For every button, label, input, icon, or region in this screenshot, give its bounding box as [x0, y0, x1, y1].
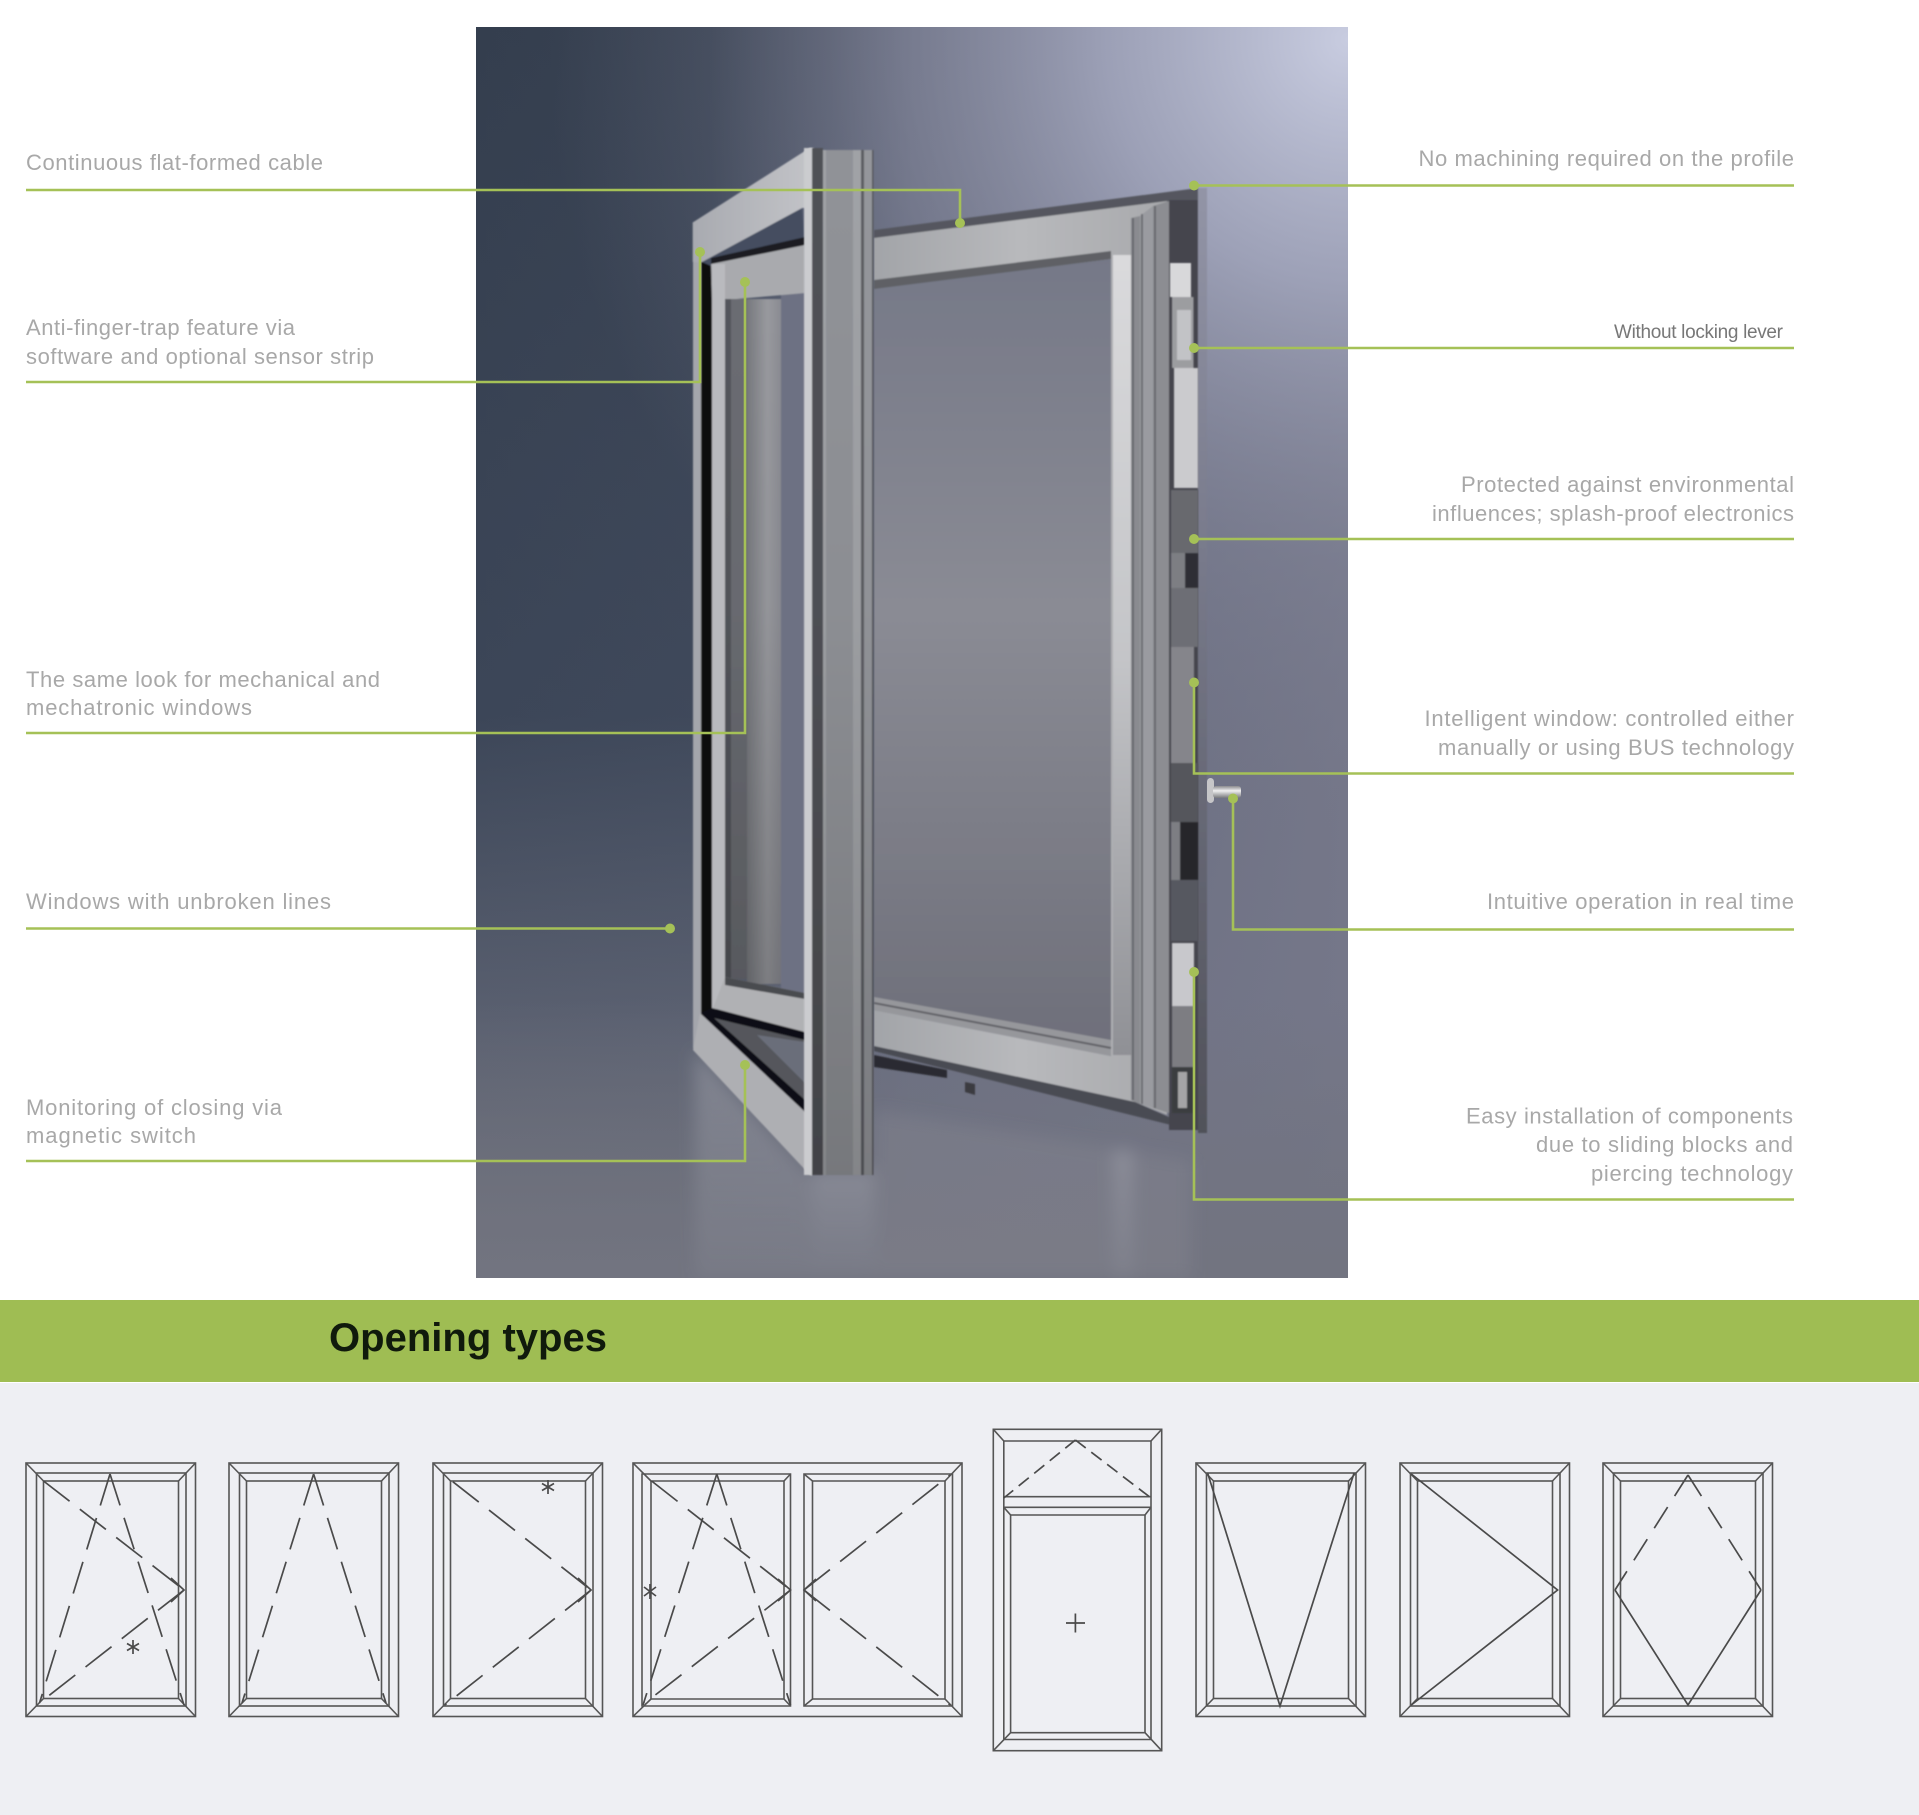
- photo background: [476, 27, 1348, 1278]
- handle: [1207, 778, 1241, 803]
- callout: Continuous flat-formed cable: [26, 150, 965, 228]
- callout: Protected against environmental influences: influences; splash-proof electronics: [1432, 501, 1794, 526]
- callout: Protected against environmental influences: [1189, 472, 1794, 544]
- callout: No machining required: No machining required on the profile: [1418, 146, 1794, 171]
- callout: Easy installation: Easy installation of components: [1466, 1104, 1793, 1128]
- section heading band: Opening types: Opening types: [329, 1316, 607, 1360]
- icon: reversible window: [1603, 1463, 1772, 1716]
- product photo: aluminium window: [476, 27, 1348, 1278]
- floor reflections: [695, 1050, 1191, 1278]
- callout: Intuitive operation: Intuitive operation in real time: [1487, 889, 1794, 914]
- window sash and frame, right part: [874, 188, 1207, 1133]
- callout: Easy installation: [1189, 967, 1794, 1200]
- callout: The same look: mechatronic windows: [26, 695, 252, 720]
- callout: Windows with unbroken lines: [26, 889, 675, 934]
- icon: tilt window: [229, 1463, 398, 1716]
- open sash and frame, left part: [693, 148, 814, 1176]
- icon: turn-tilt window, left-hand: [26, 1463, 196, 1716]
- callout: Easy installation: due to sliding blocks and: [1536, 1132, 1793, 1157]
- callout: The same look: [26, 277, 750, 733]
- icon: side-hung window, solid: [1400, 1463, 1570, 1716]
- central vertical profile: [804, 148, 874, 1175]
- callout: Protected against environmental influences: Protected against environmental: [1461, 472, 1794, 497]
- icon: double window, turn-tilt and turn: [633, 1463, 962, 1716]
- callout: Continuous flat-formed cable: Continuous flat-formed cable: [26, 150, 323, 175]
- icon: bottom-hung window, solid: [1196, 1463, 1366, 1716]
- icon: door with tilt transom: [993, 1429, 1162, 1751]
- callout: Intuitive operation: [1228, 794, 1794, 930]
- icon: turn window, dashed: [433, 1463, 602, 1716]
- callout: The same look: The same look for mechanical and: [26, 667, 380, 692]
- callout: Monitoring of closing: magnetic switch: [26, 1123, 196, 1148]
- callout: Anti-finger-trap feature: Anti-finger-trap feature via: [26, 315, 296, 340]
- hardware strip on the right edge: [1170, 263, 1198, 1113]
- callout: Without locking lever: Without locking lever: [1614, 322, 1784, 343]
- callout: Anti-finger-trap feature: software and optional sensor strip: [26, 344, 374, 369]
- callout: Anti-finger-trap feature: [26, 247, 705, 382]
- callout: Easy installation: piercing technology: [1591, 1161, 1793, 1186]
- callout: Monitoring of closing: [26, 1060, 750, 1161]
- callout: Intelligent window: [1189, 678, 1794, 774]
- callout: Intelligent window: manually or using BUS technology: [1438, 735, 1794, 760]
- section heading band: Opening types: [0, 1300, 1919, 1382]
- callout: Intelligent window: Intelligent window: controlled either: [1424, 706, 1794, 731]
- panel: opening types background: [0, 1383, 1919, 1815]
- callout: Monitoring of closing: Monitoring of closing via: [26, 1095, 283, 1120]
- callout: Without locking lever: [1189, 322, 1794, 353]
- callout: Windows with unbroken lines: Windows with unbroken lines: [26, 889, 331, 914]
- callout: No machining required: [1189, 146, 1794, 190]
